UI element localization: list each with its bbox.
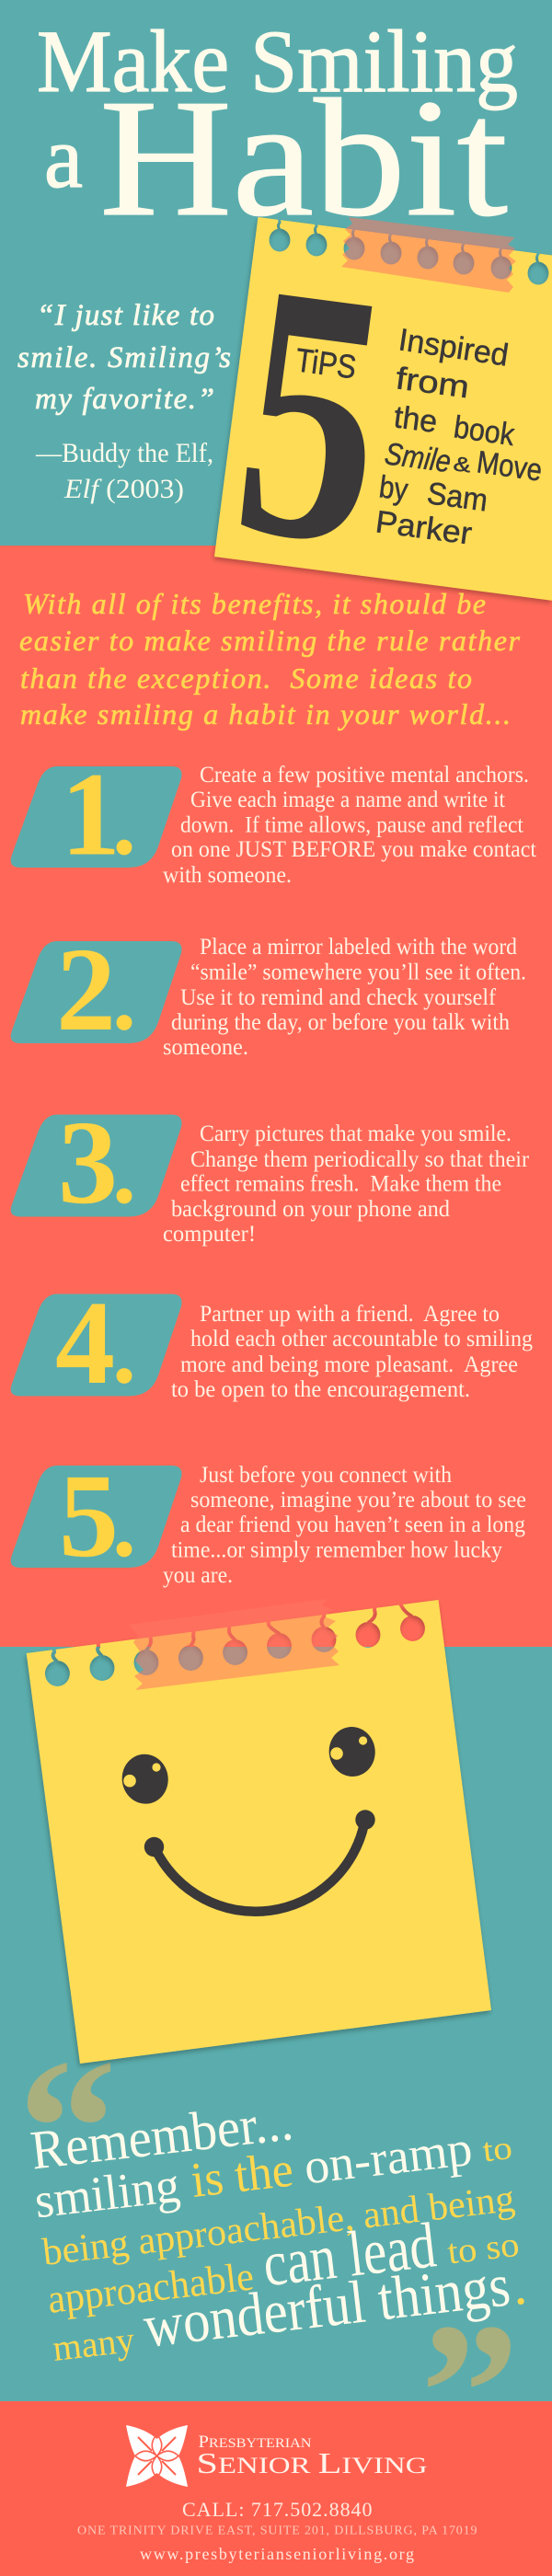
number badge 2 [11, 924, 182, 1056]
movie quote [17, 299, 231, 504]
panel: teal header background [0, 0, 552, 546]
number badge 1 [11, 749, 182, 881]
line 2: is the [188, 2142, 296, 2208]
handwritten subtitle: Smile [383, 436, 453, 479]
intro paragraph: easier to make smiling the rule rather [19, 624, 521, 657]
intro paragraph: make smiling a habit in your world... [20, 697, 511, 730]
handwritten subtitle: by [377, 469, 410, 508]
tip 4 text [171, 1302, 533, 1402]
footer contact details: www.presbyterianseniorliving.org [140, 2545, 414, 2563]
smiley note card [27, 1599, 491, 2064]
tip 5 text: a dear friend you haven’t seen in a long [180, 1512, 525, 1537]
intro paragraph [19, 587, 521, 730]
tip 5 text: time...or simply remember how lucky [171, 1538, 502, 1562]
smiley face [119, 1724, 378, 1912]
tip 5 text: someone, imagine you’re about to see [190, 1488, 526, 1512]
footer contact details: ONE TRINITY DRIVE EAST, SUITE 201, DILLSBURG, PA 17019 [77, 2524, 477, 2538]
tip 1 text: Give each image a name and write it [190, 788, 505, 812]
note card: 5 tips [214, 207, 552, 622]
tip 2 text: during the day, or before you talk with [171, 1010, 510, 1035]
handwritten subtitle: Inspired [397, 322, 511, 374]
handwritten subtitle: the [392, 399, 440, 440]
handwritten subtitle: & [452, 452, 473, 477]
footer organisation name: PRESBYTERIAN [199, 2432, 312, 2452]
number badge 4: 4 [55, 1277, 115, 1409]
number badge 4 [11, 1277, 182, 1409]
number badge 1: 1 [61, 749, 121, 881]
footer logo mark [126, 2425, 188, 2487]
yellow torn paper [27, 1600, 491, 2064]
tip 5 text [163, 1463, 526, 1588]
tip 4 text: more and being more pleasant. Agree [180, 1352, 518, 1377]
intro paragraph: than the exception. Some ideas to [20, 661, 472, 695]
line 5: wonderful things [140, 2251, 513, 2361]
tip 1 text: on one JUST BEFORE you make contact [171, 837, 536, 862]
tip 3 text: background on your phone and [171, 1197, 450, 1222]
footer contact details [77, 2498, 477, 2563]
tip 2 [11, 924, 526, 1060]
line 4 [45, 2210, 522, 2322]
tip 3 text: effect remains fresh. Make them the [180, 1172, 501, 1196]
number badge 5: 5 [59, 1450, 119, 1582]
smile mouth [144, 1810, 375, 1912]
movie quote: my favorite.” [35, 383, 214, 416]
panel: teal closing background [0, 1647, 552, 2401]
big numeral 5: 5 [218, 207, 407, 622]
movie quote: smile. Smiling’s [17, 341, 231, 374]
line 5: many [51, 2318, 136, 2369]
intro paragraph: With all of its benefits, it should be [23, 587, 486, 620]
handwritten subtitle [374, 322, 544, 552]
yellow torn paper [214, 217, 552, 604]
line 4: approachable [45, 2253, 256, 2322]
line 4: can lead [259, 2210, 440, 2300]
tip 5 text: Just before you connect with [200, 1463, 452, 1488]
tip 1 text: Create a few positive mental anchors. [200, 763, 529, 788]
footer organisation name: SENIOR LIVING [197, 2446, 427, 2479]
tips label: TiPS [293, 340, 359, 386]
number badge 3 [11, 1097, 182, 1229]
tip 2 text: Use it to remind and check yourself [180, 985, 497, 1010]
right eye [326, 1724, 378, 1779]
tip 3 [11, 1097, 530, 1247]
footer organisation name [197, 2432, 427, 2479]
line 2: smiling [31, 2157, 182, 2228]
title: Make Smiling [37, 12, 518, 110]
tip 2 text [163, 935, 526, 1060]
panel: footer background [0, 2401, 552, 2576]
number badge 2: 2 [56, 924, 116, 1056]
number badge 3: 3 [58, 1097, 118, 1229]
handwritten subtitle: Sam [425, 476, 489, 519]
movie quote: “I just like to [37, 299, 214, 332]
line 5 [51, 2251, 529, 2369]
tape [129, 1599, 339, 1690]
handwritten subtitle: from [394, 361, 471, 405]
tip 5 [11, 1450, 526, 1588]
tip 3 text: Change them periodically so that their [190, 1147, 530, 1172]
tip 2 text: someone. [163, 1035, 248, 1060]
line 5: . [509, 2255, 529, 2317]
tip 3 text [163, 1121, 530, 1247]
title: a [44, 108, 83, 206]
line 4: to so [445, 2225, 522, 2271]
tip 4 text: to be open to the encouragement. [171, 1377, 470, 1402]
tip 3 text: computer! [163, 1222, 256, 1247]
handwritten subtitle: Parker [374, 504, 474, 552]
tip 1 text: down. If time allows, pause and reflect [180, 813, 523, 837]
tip 2 text: Place a mirror labeled with the word [200, 935, 517, 960]
tape [341, 217, 516, 293]
title: Habit [99, 64, 508, 251]
opening quotation mark: “ [18, 2018, 117, 2237]
tip 5 text: you are. [163, 1563, 233, 1588]
tip 4 [11, 1277, 533, 1409]
movie quote: —Buddy the Elf, [35, 438, 213, 468]
tip 4 text: Partner up with a friend. Agree to [200, 1302, 500, 1327]
title [37, 12, 518, 251]
footer contact details: CALL: 717.502.8840 [182, 2498, 372, 2521]
handwritten subtitle: book [452, 409, 517, 453]
tip 2 text: “smile” somewhere you’ll see it often. [190, 960, 526, 984]
line 2: on-ramp [301, 2121, 475, 2194]
line 1: Remember... [28, 2090, 296, 2181]
line 3: being approachable, and being [40, 2178, 517, 2274]
tip 1 text [163, 763, 536, 888]
left eye [119, 1752, 171, 1807]
tip 3 text: Carry pictures that make you smile. [200, 1121, 512, 1146]
panel: red tips background [0, 546, 552, 1647]
tip 1 text: with someone. [163, 863, 292, 888]
tip 4 text: hold each other accountable to smiling [190, 1327, 533, 1351]
tip 1 [11, 749, 536, 888]
movie quote: Elf (2003) [63, 474, 184, 504]
number badge 5 [11, 1450, 182, 1582]
line 2 [31, 2121, 514, 2228]
closing quotation mark: ” [420, 2282, 519, 2502]
closing message [28, 2090, 529, 2369]
line 2: to [480, 2129, 514, 2168]
